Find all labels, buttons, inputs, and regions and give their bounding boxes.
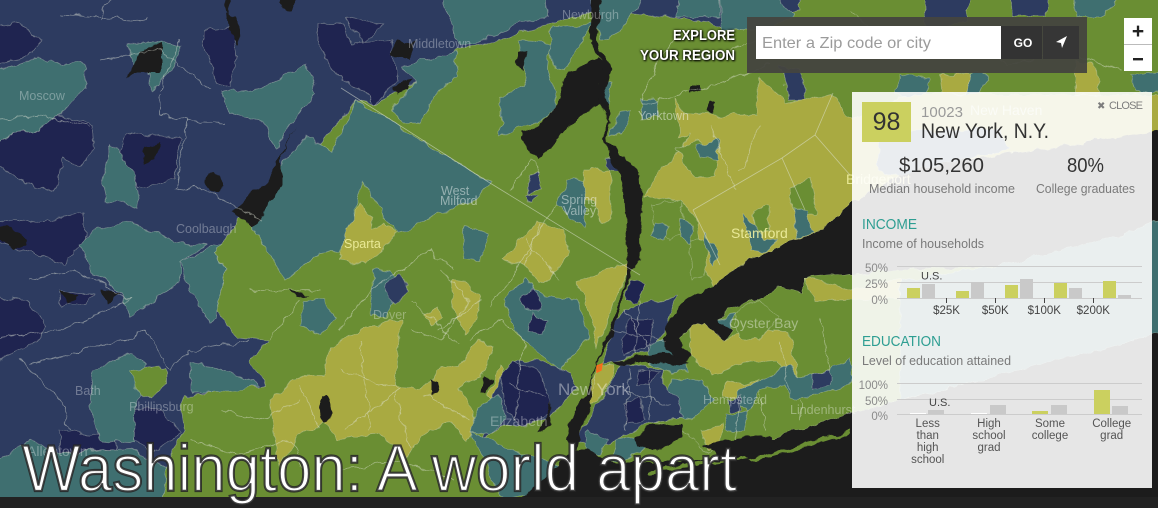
stat: median income: $105,260 [899, 155, 984, 177]
income axis percent labels [865, 263, 888, 307]
label: Stamford: Stamford [731, 225, 788, 241]
education category labels: High [977, 418, 1001, 430]
water: bays along the south shore [703, 436, 780, 458]
locate button [1043, 26, 1079, 59]
explore your region label [640, 28, 735, 64]
label: West Milford: West [441, 184, 469, 198]
place name: New York, N.Y. [921, 120, 1049, 143]
region: yellow counties, Bergen and Rockland [425, 62, 1100, 410]
education category labels: school [972, 430, 1006, 442]
education category labels: College [1092, 418, 1131, 430]
label: Bath: Bath [75, 384, 101, 398]
place names [19, 8, 1042, 459]
region: dark navy neighbourhoods [500, 280, 660, 427]
region: navy tint beneath the panel [878, 128, 1010, 175]
region: Long Island under the panel, teal [900, 215, 1158, 400]
panel background [852, 92, 1152, 488]
label: Moscow: Moscow [19, 89, 66, 103]
zoom control [1124, 18, 1152, 71]
go button: GO [1014, 36, 1032, 50]
education category labels: school [911, 454, 944, 466]
income bracket labels: $100K [1028, 305, 1061, 317]
label: Hempstead: Hempstead [703, 393, 767, 407]
region: Long Island teal band [665, 312, 850, 432]
education category labels: than [917, 430, 939, 442]
label: Elizabeth: Elizabeth [490, 413, 548, 429]
income bracket labels: $50K [982, 305, 1009, 317]
education category labels: grad [1100, 430, 1123, 442]
label: Spring Valley: Valley [563, 204, 597, 218]
label: Dover: Dover [373, 308, 406, 322]
water: Hudson river [565, 0, 642, 450]
education category labels: college [1032, 430, 1068, 442]
label: New York: New York [558, 380, 630, 399]
income axis percent labels: 25% [865, 279, 888, 291]
water: Atlantic ocean [500, 330, 1158, 508]
stat: college graduates: College graduates [1036, 182, 1135, 196]
education category labels [911, 418, 1131, 466]
zip code: 10023 [921, 104, 963, 121]
label: Bridgeport: Bridgeport [846, 171, 911, 187]
explore your region label: EXPLORE [673, 28, 735, 44]
income bar chart [865, 263, 1142, 317]
education category labels: Some [1035, 418, 1065, 430]
detail panel [852, 92, 1152, 488]
education axis percent labels: 100% [859, 380, 888, 392]
income bracket labels: $25K [933, 305, 960, 317]
education bars for the U.S. [928, 405, 1128, 414]
barrier islands [650, 430, 850, 474]
income axis percent labels: 50% [865, 263, 888, 275]
education axis percent labels [859, 380, 888, 423]
water: Delaware river sliver [233, 127, 295, 227]
close button: ✖ [1097, 101, 1105, 112]
close button: CLOSE [1109, 100, 1143, 112]
stat: college graduates: 80% [1067, 155, 1104, 177]
score box [862, 102, 911, 142]
income axis percent labels: 0% [871, 295, 888, 307]
education subheading: Level of education attained [862, 354, 1011, 368]
state boundary lines [341, 88, 850, 275]
stat: median income: Median household income [869, 182, 1015, 196]
title: Washington: A world apart [22, 431, 737, 505]
region: Sparta yellow county [341, 203, 398, 265]
search input [756, 26, 1001, 59]
search bar backing [747, 17, 1087, 73]
selected zip code outline [597, 364, 602, 372]
search placeholder: Enter a Zip code or city [762, 35, 931, 52]
label: Middletown: Middletown [408, 37, 471, 51]
U.S. marker: U.S. [921, 270, 942, 282]
zoom out [1133, 58, 1143, 60]
water: Jamaica Bay [635, 422, 685, 450]
water: Newark bay channel [538, 400, 553, 432]
region: Long Island, green base [657, 215, 1158, 453]
region: teal neighbourhoods around the city [470, 280, 690, 497]
label: Phillipsburg: Phillipsburg [129, 400, 194, 414]
go button [1001, 26, 1042, 59]
stat: median income [869, 155, 1015, 196]
income bracket labels: $200K [1077, 305, 1110, 317]
region: green and teal insets in Connecticut and Westchester [650, 140, 817, 280]
region: teal insets in Connecticut and Westchester [650, 140, 812, 265]
label: West Milford: Milford [440, 194, 478, 208]
zoom in: + [1132, 20, 1144, 43]
water: Long Island Sound [664, 128, 1158, 365]
region: yellow counties, central New Jersey [270, 320, 494, 467]
income heading: INCOME [862, 216, 917, 233]
label: Oyster Bay: Oyster Bay [729, 315, 798, 331]
region: navy outliers within green [385, 0, 1050, 305]
bottom band [0, 497, 1158, 508]
region: teal counties, west and central [0, 42, 316, 508]
label: Spring Valley: Spring [561, 193, 597, 207]
income bars for the ZIP [907, 281, 1116, 298]
region: teal counties, Newburgh and Hudson valley [191, 0, 1158, 393]
education heading: EDUCATION [862, 333, 941, 350]
label: Lindenhurst: Lindenhurst [790, 403, 856, 417]
income subheading: Income of households [862, 237, 984, 251]
neighbourhood: Manhattan yellow [590, 363, 615, 402]
income bracket labels [933, 305, 1110, 317]
U.S. marker: U.S. [929, 397, 950, 409]
stat: college graduates [1036, 155, 1135, 196]
income ticks [946, 298, 1094, 303]
education category labels: high [917, 442, 939, 454]
label: Sparta: Sparta [344, 237, 381, 251]
water: East River [612, 352, 688, 366]
region: small green outlier [130, 367, 165, 400]
region: teal counties, northwest New Jersey [253, 100, 490, 280]
label: Newburgh: Newburgh [562, 8, 619, 22]
income bars for the U.S. [922, 279, 1131, 298]
education category labels: grad [977, 442, 1001, 454]
region: Long Island, green insets [733, 300, 778, 340]
region: yellow counties, Westchester and Connecticut [643, 77, 1158, 287]
explore your region label: YOUR REGION [640, 48, 735, 64]
region: Long Island north shore, yellow [690, 277, 900, 450]
label: Yorktown: Yorktown [638, 109, 689, 123]
label: Allentown: Allentown [27, 443, 88, 459]
region: New York City, navy neighbourhoods [483, 295, 683, 447]
water: Hudson highlands lake [523, 57, 610, 161]
education bar chart [859, 380, 1142, 466]
education category labels: Less [916, 418, 940, 430]
label: New Haven: New Haven [970, 102, 1042, 118]
water: reservoirs and lakes, west [128, 43, 161, 78]
label: Coolbaugh: Coolbaugh [176, 222, 237, 236]
score box: 98 [873, 108, 900, 136]
region: Long Island navy towns [728, 370, 830, 412]
education axis percent labels: 0% [871, 411, 888, 423]
education axis percent labels: 50% [865, 396, 888, 408]
search bar [747, 17, 1087, 73]
region: dark navy patches, west [0, 17, 398, 453]
education bars for the ZIP [910, 390, 1110, 414]
